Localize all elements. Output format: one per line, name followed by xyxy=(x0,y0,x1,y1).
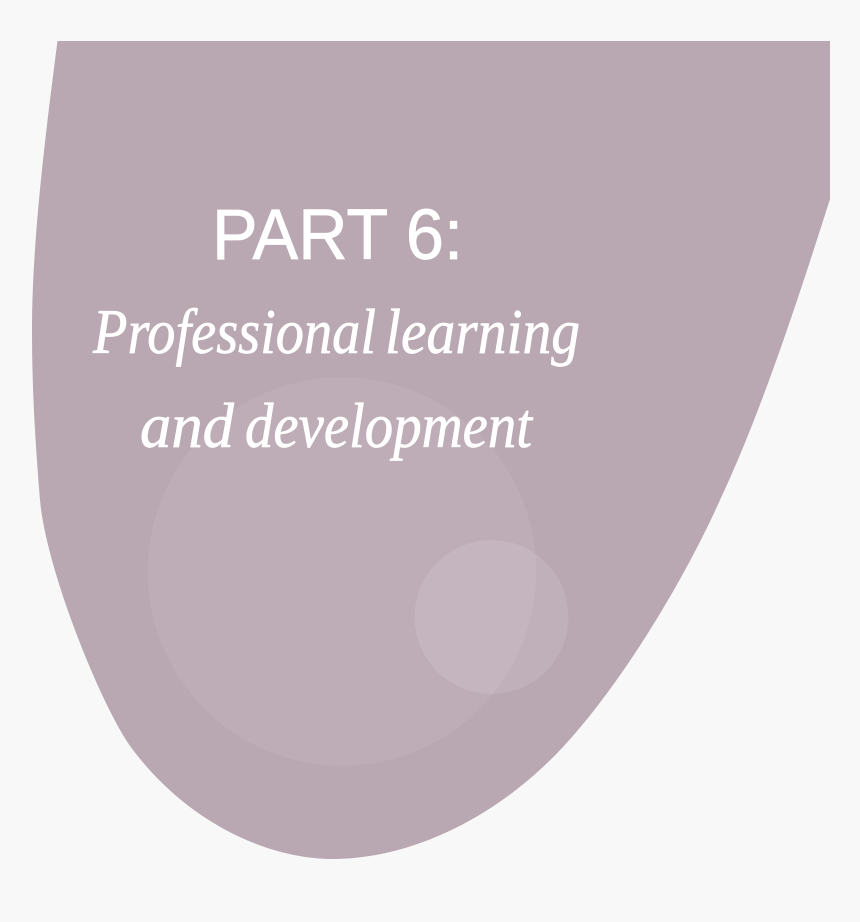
heading: part 6: PART 6: xyxy=(212,196,463,275)
subtitle line 2 xyxy=(140,390,534,461)
subtitle line 1 xyxy=(92,296,580,367)
decorative small circle xyxy=(414,540,568,694)
subtitle line 2: and xyxy=(140,390,235,461)
subtitle line 1: learning xyxy=(385,296,580,367)
subtitle line 1: Professional xyxy=(92,296,376,367)
decorative large circle xyxy=(148,377,536,766)
subtitle line 2: development xyxy=(245,390,534,461)
